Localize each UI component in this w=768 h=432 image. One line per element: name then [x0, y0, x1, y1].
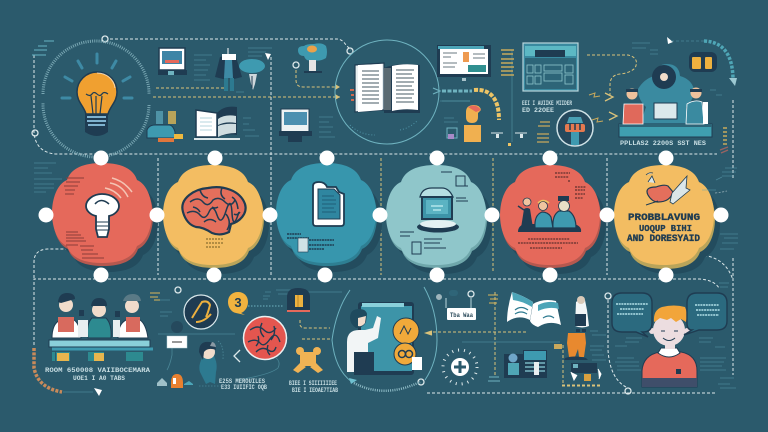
icon: red brain	[244, 316, 286, 360]
icon: open white book	[488, 292, 561, 327]
arrow: dotted curved path	[433, 88, 499, 120]
icon: desk monitor	[554, 344, 602, 386]
icon: orange trousers	[564, 331, 606, 360]
connector nodes and arrowheads	[32, 36, 673, 396]
arrow: dotted teal arc	[589, 41, 737, 144]
panel: three workers at table	[45, 293, 153, 382]
text: panel caption	[522, 100, 572, 114]
icon: white card	[436, 290, 476, 320]
connector circles: white nodes	[38, 150, 728, 282]
icon: second monitor	[279, 109, 335, 142]
text: lower captions: BIEE I SIIIIIIIEE	[289, 380, 337, 387]
arrow: orange dotted curve	[34, 348, 93, 392]
icon: number 3 bubble	[228, 290, 342, 315]
icon: white card: Tba Waa	[450, 312, 473, 319]
icon: girl figure	[199, 341, 223, 386]
icon: person with cap	[440, 101, 527, 146]
panel: light bulb with ring	[32, 41, 149, 157]
panel: step 3 teal document	[276, 163, 382, 272]
icon: small orange figures	[157, 374, 193, 388]
text: lower captions: E33 IUIIFIC OQB	[221, 384, 267, 391]
icon: top monitor with slides	[437, 45, 514, 81]
panel: step 6 yellow title: UOQUP BIHI	[639, 224, 692, 234]
icon: dome	[287, 288, 310, 312]
text: panel caption: ED 22OEE	[522, 107, 554, 114]
panel: team at desk	[619, 64, 712, 147]
icon: tree	[298, 43, 327, 73]
panel: three workers at table: ROOM 650008 VAIIBOCEMARA	[45, 367, 150, 374]
panel: step 2 yellow brain	[163, 165, 269, 274]
text: lower captions: E25S MEROUILES	[219, 378, 265, 385]
icon: dark window pad	[689, 52, 717, 72]
text: panel caption: EEI I AUIIKE MIIDER	[522, 100, 572, 107]
panel: step 6 yellow title	[614, 165, 720, 274]
icon: plus sunburst	[443, 350, 477, 384]
connector lines	[34, 39, 733, 393]
icon: stacked hats	[147, 111, 183, 142]
panel: man at screen in circle	[332, 287, 437, 391]
icon: caped figure	[215, 48, 272, 92]
panel: step 6 yellow title: AND DORESYAID	[627, 234, 700, 245]
icon: small monitor	[158, 48, 212, 80]
icon: open book	[194, 107, 259, 140]
text: lower captions: BIE I IEOAE7TIAB	[292, 387, 338, 394]
side notes around boy	[615, 283, 736, 388]
panel: central open book	[335, 40, 439, 144]
panel: step 4 light teal laptop	[386, 165, 492, 274]
icon: yellow joint	[293, 347, 323, 373]
panel: smiling boy with speech bubbles	[612, 293, 727, 387]
text: lower captions	[219, 378, 338, 394]
panel: three workers at table: UOE1 I A0 TABS	[73, 375, 125, 382]
icon: speech ellipse and stand	[239, 59, 265, 90]
icon: number 3 bubble: 3	[234, 295, 242, 310]
panel: team at desk: PPLLAS2 2200S SST NES	[620, 140, 706, 147]
icon: standing figure	[575, 296, 589, 332]
panel: step 1 red idea	[52, 163, 158, 272]
icon: yellow gesture badge	[150, 293, 218, 333]
icon: white label card	[167, 336, 187, 348]
panel: step 5 red team	[500, 165, 606, 274]
side micro text	[34, 147, 738, 249]
icon: badge circle	[537, 110, 593, 146]
panel: step 6 yellow title: PROBBLAVUNG	[628, 213, 700, 224]
icon: two screen panels	[488, 350, 547, 381]
icon: control panel	[523, 43, 578, 91]
